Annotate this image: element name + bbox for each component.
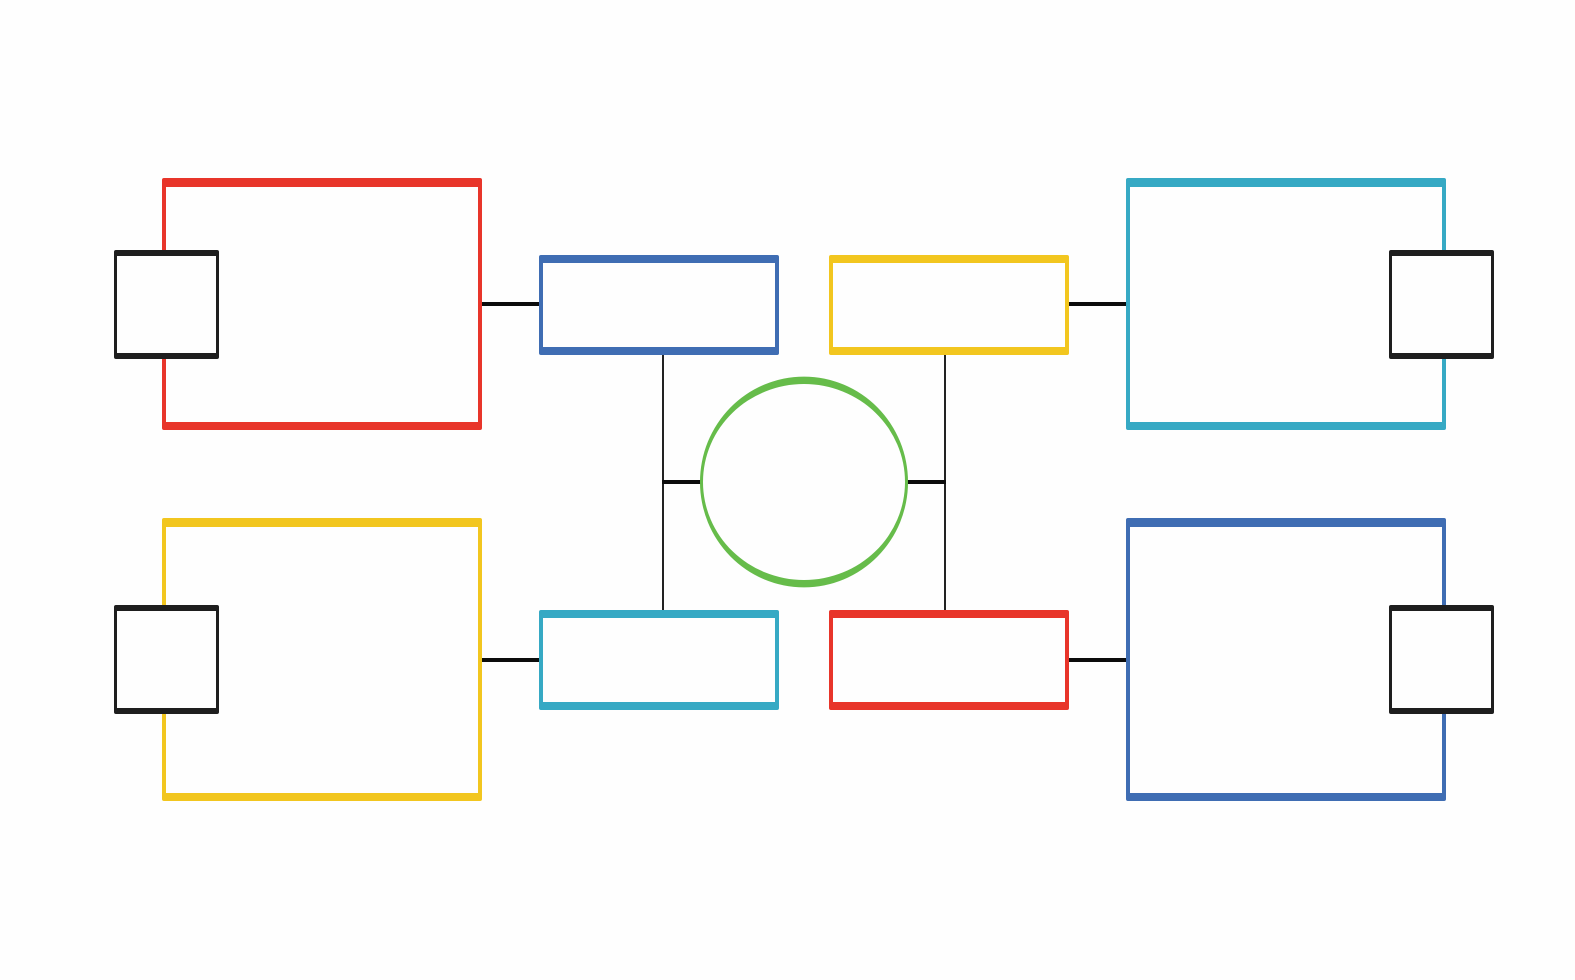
connector: red box to bottom-right panel	[1069, 658, 1126, 662]
connector: top-left panel to blue box	[482, 302, 539, 306]
connector: left vertical line to circle	[662, 480, 701, 484]
panel: top-left red	[162, 178, 482, 430]
connector: yellow box to top-right panel	[1069, 302, 1126, 306]
square tag: top-right	[1389, 250, 1494, 359]
panel: bottom-left yellow	[162, 518, 482, 801]
panel: bottom-right blue	[1126, 518, 1446, 801]
square tag: bottom-right	[1389, 605, 1494, 714]
connector: left vertical line	[662, 354, 664, 610]
connector: bottom-left panel to cyan box	[482, 658, 539, 662]
connector: right vertical line	[944, 354, 946, 610]
square tag: top-left	[114, 250, 219, 359]
box: red, lower centre-right	[829, 610, 1069, 710]
panel: top-right cyan	[1126, 178, 1446, 430]
box: cyan, lower centre-left	[539, 610, 779, 710]
box: blue, upper centre-left	[539, 255, 779, 355]
connector: circle to right vertical line	[907, 480, 946, 484]
square tag: bottom-left	[114, 605, 219, 714]
box: yellow, upper centre-right	[829, 255, 1069, 355]
